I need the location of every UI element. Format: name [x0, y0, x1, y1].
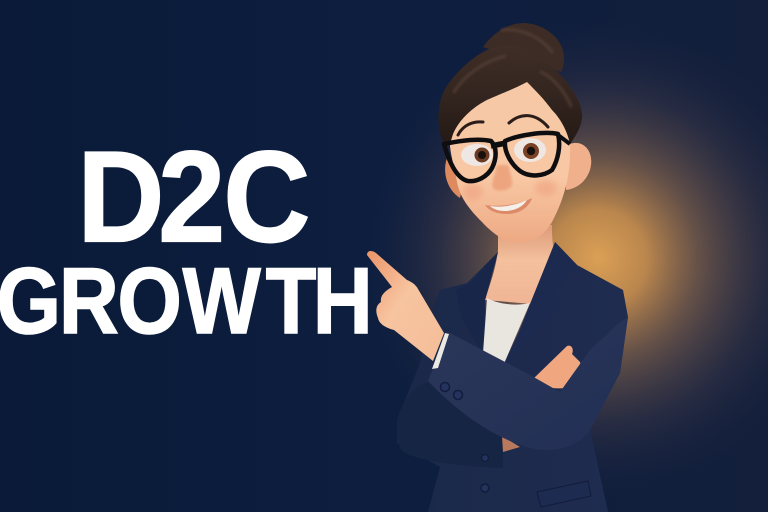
blazer lapels [456, 242, 577, 367]
hand on arm: fingers [532, 346, 581, 388]
eyebrows [458, 116, 548, 135]
sleeve buttons [440, 382, 489, 492]
title: D2C GROWTH [0, 123, 373, 353]
cheeks [463, 180, 557, 200]
ears [445, 143, 591, 198]
eyes [461, 138, 546, 166]
mouth: smile [485, 198, 532, 214]
raised forearm sleeve [428, 317, 628, 450]
title line: GROWTH: GROWTH [0, 248, 373, 353]
pocket flap [537, 481, 591, 507]
blazer body [397, 242, 628, 512]
hair highlights [454, 30, 571, 106]
nose [492, 165, 512, 191]
lower sleeve [397, 382, 503, 468]
neck and chest [485, 225, 556, 304]
shirt cuff [432, 333, 449, 369]
title line: D2C: D2C [77, 123, 311, 269]
hair bun [483, 23, 564, 72]
pointing hand [367, 251, 444, 361]
character: woman in navy blazer pointing at the title [367, 23, 628, 512]
skin gap under arm [502, 436, 520, 452]
face [450, 80, 570, 243]
shirt [483, 298, 530, 366]
hair [438, 45, 582, 146]
glasses [444, 133, 570, 181]
